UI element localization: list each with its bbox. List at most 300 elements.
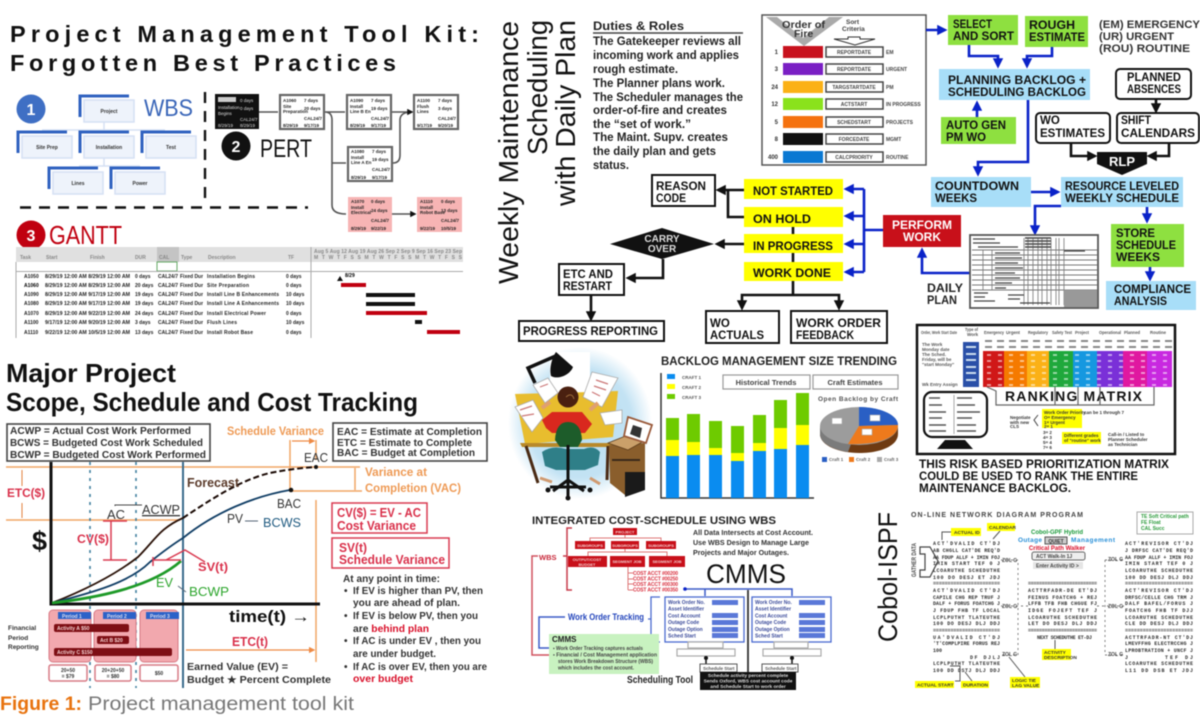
PERT nodes: 9/17/19: [417, 123, 433, 128]
chart: earned value: time(t) →: [229, 607, 310, 626]
scheduling tool: Schedule activity percent complete: [708, 673, 788, 679]
PERT nodes: 7 days: [372, 149, 387, 154]
duties and roles: the daily plan and gets: [593, 144, 716, 158]
duties and roles: The Gatekeeper reviews all: [593, 34, 741, 48]
centre code column: IDGE FOJEFT TEF J: [1028, 608, 1097, 614]
PERT nodes: Install: [350, 104, 363, 109]
legend: ACWP BCWS BCWP: ACWP = Actual Cost Work Performed: [10, 426, 191, 437]
PERT start node: Installation: [218, 105, 240, 110]
black outlined boxes: ABSENCES: [1127, 84, 1181, 96]
WBS red tree: COST ACCT #00300: [633, 582, 678, 588]
work order forms: Schedule Start: [703, 666, 735, 671]
order of fire table: URGENT: [886, 67, 907, 73]
matrix notes: Negotiate: [1010, 415, 1031, 420]
duties and roles: status.: [593, 158, 629, 172]
matrix notes: with new: [1009, 420, 1029, 425]
green legend box: CAL Succ: [1141, 526, 1165, 532]
PERT nodes: Line A En: [351, 160, 372, 165]
PERT nodes: Robot Base: [420, 210, 446, 215]
matrix header: Order, Work Start Date: [921, 330, 957, 335]
yellow annotation labels: DURATION: [963, 682, 988, 688]
yellow annotation labels: LOGIC TIE: [1012, 678, 1037, 684]
yellow annotation labels: LAG VALUE: [1012, 683, 1040, 689]
variance at completion label: Completion (VAC): [365, 481, 461, 495]
matrix notes: 5= 4: [1043, 440, 1052, 445]
GANTT heading: GANTT: [49, 220, 122, 250]
gantt table: Start: [46, 255, 58, 261]
left code column: =======================: [933, 581, 1000, 587]
perform work: PERFORM: [892, 218, 952, 232]
gantt table: A1070: [24, 311, 39, 317]
centre code column: NEXT SCHEDUTHE ET-DJ: [1037, 635, 1092, 641]
pie chart: Craft 3: [884, 457, 899, 462]
centre code column: [1028, 581, 1097, 641]
WBS red tree: SUBGROUPS: [648, 543, 674, 548]
text block: at any point in time: At any point in time:: [343, 574, 440, 585]
GUI hybrid title: QUIET: [1048, 539, 1064, 545]
right code column: ACTTRFADR-NT CT'DJ: [1125, 635, 1193, 641]
matrix colour columns: [963, 342, 1172, 387]
PERT nodes: A1080: [351, 149, 365, 154]
left code column: 100: [933, 648, 942, 654]
PERT nodes: 10/5/19: [441, 226, 457, 231]
carry over diamond: OVER: [648, 244, 677, 255]
order of fire table: [762, 15, 926, 165]
matrix notes: 2= 1: [1044, 424, 1053, 429]
order of fire table: 3: [775, 67, 779, 73]
text block: at any point in time: you are ahead of plan.: [353, 598, 460, 609]
work order tracking: Work Order Tracking: [568, 612, 644, 622]
carry over diamond: CARRY: [644, 234, 680, 245]
PERT nodes: 7 days: [438, 98, 453, 103]
PERT nodes: CAL24/7: [441, 218, 460, 223]
scheduling tool: [627, 672, 796, 690]
figure caption: Project management tool kit: [88, 694, 355, 715]
right code column: ACT'REVISOR CT'DJ: [1125, 588, 1193, 594]
green legend box: [1137, 512, 1193, 534]
gantt table: A1100: [24, 320, 39, 326]
PERT nodes: CAL24/7: [372, 167, 391, 172]
work order forms: Asset Identifier: [668, 606, 704, 612]
work order forms: Outage Code: [668, 620, 699, 626]
PERT start node: [215, 94, 259, 129]
chart: earned value: SV(t): [198, 560, 228, 574]
ranking caption: COULD BE USED TO RANK THE ENTIRE: [919, 469, 1138, 483]
black outlined boxes: CODE: [656, 193, 686, 205]
PERT nodes: A1060: [283, 98, 297, 103]
panel: WBS: [16, 94, 196, 194]
black outlined boxes: WO: [1040, 115, 1060, 127]
earned value formula: Budget ★ Percent Complete: [187, 675, 331, 686]
blue backlog boxes: COMPLIANCE: [1114, 284, 1191, 296]
gantt table: 8/29/19 12:00 AM 8/29/19 12:00 AM: [45, 274, 130, 280]
PERT start node: 8/29/19: [218, 123, 234, 128]
right code column: IMIN START TEF 0 J: [1125, 561, 1193, 567]
daily plan form: DAILY: [927, 283, 963, 295]
WBS red tree: SUBGROUPS: [577, 543, 603, 548]
blue backlog boxes: SCHEDULING BACKLOG: [948, 87, 1086, 99]
CMMS green note: ▪ Work Order Tracking captures actuals: [553, 646, 643, 652]
black outlined boxes: REASON: [656, 181, 706, 193]
daily plan form: PLAN: [927, 295, 957, 307]
blue backlog boxes: WEEKLY SCHEDULE: [1065, 193, 1179, 205]
right code column: FOATCHG FHB TF DJJ: [1125, 608, 1193, 614]
gantt table: Flush Lines: [207, 320, 237, 326]
chart: earned value: $: [32, 526, 47, 556]
illustration: planner at desk: [508, 347, 652, 500]
black outlined boxes: PLANNED: [1127, 72, 1181, 84]
CMMS green note: [549, 634, 659, 674]
gantt table: Fixed Dur: [180, 311, 203, 317]
pie chart: Craft 1: [829, 457, 844, 462]
text block: at any point in time: [343, 574, 487, 685]
status boxes yellow: [744, 179, 843, 281]
work order forms: Work Order No.: [668, 600, 705, 606]
right code column: CLE DD DESJ DLJ DDJ: [1125, 621, 1193, 627]
gantt table: 19 days: [135, 301, 154, 307]
gantt table: Fixed Dur: [180, 301, 203, 307]
text block: at any point in time: over budget: [353, 674, 414, 685]
duties and roles: The Maint. Supv. creates: [593, 130, 728, 144]
ETC(t) span: [186, 635, 314, 650]
legend: EAC ETC BAC: ETC = Estimate to Complete: [337, 438, 472, 449]
ranking caption: MAINTENANCE BACKLOG.: [919, 481, 1071, 495]
gantt table: Fixed Dur: [180, 292, 203, 298]
PERT nodes: 7 days: [371, 98, 386, 103]
centre code column: LCOARUTHE SCHEDUTHE: [1028, 615, 1097, 621]
order of fire table: MGMT: [886, 137, 901, 143]
WBS red tree: WBS: [539, 553, 556, 562]
matrix notes: can be 1 through 7: [1084, 410, 1125, 415]
panel: backlog trending: [661, 354, 899, 498]
PERT heading: PERT: [260, 135, 312, 163]
tabs: [723, 375, 898, 389]
right code column: AA FDUP ALLF + IMIN FOJ: [1125, 555, 1193, 561]
matrix header: Project: [1075, 330, 1089, 335]
text block: at any point in time: •: [344, 662, 348, 673]
order of fire table: ROUTINE: [886, 155, 909, 161]
left code column: UA'DVALID CT'DJ: [933, 635, 1000, 641]
gantt bars: [337, 273, 460, 334]
GUI hybrid title: Critical Path Walker: [1029, 546, 1086, 552]
yellow annotation labels: ACTUAL ID: [954, 530, 980, 536]
rotated heading: Cobol-ISPF: [873, 512, 903, 642]
gantt table: CAL24/7: [158, 301, 178, 307]
matrix notes: Planner Scheduler: [1108, 437, 1148, 442]
green process boxes: [941, 15, 1184, 267]
RLP shape: RLP: [1109, 154, 1135, 169]
PERT nodes: CAL24/7: [371, 116, 390, 121]
text block: at any point in time: If EV is higher than PV, then: [353, 586, 483, 597]
gantt table: Aug 5 Aug 12 Aug 19 Aug 26 Sep 2 Sep 9 Sep 16 Sep 23 Sep: [314, 249, 462, 255]
WBS tree: Power: [132, 181, 148, 187]
gantt table: A1110: [24, 330, 38, 336]
panel: PERT: [215, 94, 462, 232]
order of fire table: 24: [771, 85, 779, 91]
right code column: =======================: [1125, 628, 1193, 634]
right code column: =======================: [1125, 581, 1193, 587]
order of fire table: SCHEDSTART: [837, 120, 871, 126]
pie chart: Open Backlog by Craft: [818, 396, 899, 403]
WBS tree: Test: [166, 145, 176, 151]
PERT nodes: 9/22/19: [420, 226, 436, 231]
financial period reporting: Period: [8, 635, 28, 642]
perform work: [883, 215, 961, 247]
variance at completion label: Variance at: [365, 465, 427, 479]
matrix notes: CLS: [1010, 424, 1019, 429]
gantt table: Finish: [90, 255, 105, 261]
WBS heading: WBS: [144, 95, 193, 122]
gantt table: Install Line B Enhancements: [207, 292, 279, 298]
gantt table: A1090: [24, 292, 39, 298]
work order forms: Schedule Start: [765, 666, 797, 671]
PERT nodes: 8/29/19: [350, 123, 366, 128]
PERT start node: 0 days: [240, 106, 254, 111]
GUI hybrid title: ACT Walk-In 1J: [1036, 554, 1072, 560]
black outlined boxes: [519, 69, 1199, 343]
order of fire table: 400: [768, 155, 779, 161]
matrix header: "start Monday": [922, 362, 954, 367]
ranking caption: [919, 457, 1169, 495]
matrix notes: Different grades: [1064, 433, 1099, 438]
GUI hybrid title: [1018, 530, 1116, 570]
financial period reporting: $50: [155, 671, 163, 677]
text block: at any point in time: If EV is below PV, then you: [353, 611, 478, 622]
panel: weekly maintenance scheduling: [493, 15, 1200, 343]
order of fire table: CALCPRIORITY: [835, 155, 873, 161]
financial period reporting: Act B $20: [100, 638, 123, 644]
financial period reporting: Period 2: [107, 614, 127, 620]
right code column: LCOARUTHE SCHEDUTHE: [1125, 661, 1193, 667]
matrix header: The Work: [922, 342, 943, 347]
PERT nodes: A1100: [417, 98, 431, 103]
legend: EAC ETC BAC: EAC = Estimate at Completion: [337, 427, 482, 438]
right code column: [1125, 541, 1193, 674]
gantt table: 0 days: [286, 311, 302, 317]
rotated heading: Weekly Maintenance: [493, 21, 524, 284]
right code column: J: [1125, 655, 1128, 661]
pie chart: Craft 2: [856, 457, 871, 462]
order of fire table: PM: [886, 85, 894, 91]
work order forms: [648, 587, 831, 672]
callout: schedule variance: SV(t): [339, 541, 367, 555]
black outlined boxes: FEEDBACK: [796, 330, 855, 342]
PERT nodes: 8/29/19: [351, 175, 367, 180]
panel: Cobol-ISPF: ZOL G: [1002, 604, 1017, 610]
PERT start node: CAL24/7: [240, 117, 258, 122]
gantt table: Install Electrical Power: [207, 311, 266, 317]
matrix notes: 7= 6: [1043, 445, 1052, 450]
work order tracking: [539, 612, 644, 648]
perform work: WORK: [903, 230, 941, 244]
PERT nodes: 24 days: [371, 208, 388, 213]
right code column: LCOARUTHE SCHEDUTHE: [1125, 568, 1193, 574]
gantt table: A1050: [24, 274, 39, 280]
figure caption: Figure 1:: [0, 694, 82, 715]
work order forms: Cost Account: [668, 614, 701, 620]
centre code column: ACTTRFADR-DE ET'DJ: [1028, 588, 1097, 594]
variance at completion label: [365, 465, 461, 495]
legend: ACWP BCWS BCWP: BCWP = Budgeted Cost Work Performed: [10, 450, 206, 461]
PERT nodes: Preparation: [283, 109, 308, 114]
green process boxes: SELECT: [953, 19, 992, 31]
legend: ACWP BCWS BCWP: [7, 424, 210, 461]
blue backlog boxes: RESOURCE LEVELED: [1065, 181, 1179, 193]
gantt table: Site Preparation: [207, 283, 249, 289]
PERT nodes: Install: [351, 205, 364, 210]
PERT nodes: 20 days: [304, 106, 321, 111]
priority key: (EM) EMERGENCY: [1099, 19, 1200, 31]
priority key: (ROU) ROUTINE: [1099, 43, 1190, 55]
earned value formula: [187, 662, 331, 686]
arrows: flow black: [591, 99, 1169, 319]
matrix header: Friday, will be: [922, 357, 952, 362]
WBS red tree: SEGMENT JOB: [652, 559, 682, 564]
rotated heading: Scheduling: [522, 20, 553, 155]
text block: at any point in time: are under budget.: [353, 649, 436, 660]
icon: number 1: [16, 94, 46, 124]
carry over diamond: [610, 228, 714, 259]
matrix header: Planned: [1124, 330, 1140, 335]
order of fire table: REPORTDATE: [837, 50, 872, 56]
black outlined boxes: CALENDARS: [1121, 128, 1195, 140]
chart: earned value: ACWP: [142, 502, 180, 517]
left code column: ACT'DVALID CT'DJ: [933, 541, 1000, 547]
gantt table: 10 days: [286, 301, 305, 307]
financial period reporting: Activity C $150: [57, 650, 93, 656]
gantt table: 8/29/19 12:00 AM 9/17/19 12:00 AM: [45, 292, 130, 298]
RLP shape: [1097, 152, 1147, 175]
gantt table: 8/29/19 12:00 AM 9/17/19 12:00 AM: [45, 301, 130, 307]
right code column: LCOARUTHE SCHEDUTHE: [1125, 615, 1193, 621]
left code column: J FDUP FHB TF LOCAL: [933, 608, 1000, 614]
WBS tree: Site Prep: [36, 145, 58, 151]
right code column: LMEVFFHG ELECTRCCHG J: [1125, 641, 1193, 647]
gantt table: 10 days: [286, 292, 305, 298]
WBS tree: Lines: [71, 181, 85, 187]
matrix notes: Call-in / Listed to: [1108, 432, 1145, 437]
gantt table: 9/17/19 12:00 AM 9/20/19 12:00 AM: [45, 320, 130, 326]
gantt table: Fixed Dur: [180, 330, 203, 336]
panel: ranking matrix: [917, 325, 1175, 454]
program title: ON-LINE NETWORK DIAGRAM PROGRAM: [911, 512, 1083, 519]
PERT start node: 8/29/19: [240, 123, 256, 128]
callout: schedule variance: [332, 538, 449, 568]
matrix header: Type of: [965, 327, 978, 332]
chart: earned value: EV: [156, 575, 173, 590]
work order forms: Asset Identifier: [755, 606, 791, 612]
status boxes yellow: ON HOLD: [753, 214, 811, 226]
black outlined boxes: SHIFT: [1121, 115, 1151, 127]
status boxes yellow: WORK DONE: [753, 268, 831, 280]
left code column: DF DJLJ: [970, 655, 1000, 661]
matrix header: The Sched.: [922, 352, 946, 357]
WBS tree: Installation: [96, 145, 122, 151]
icon: number 3: 3: [27, 228, 36, 245]
blue backlog boxes: PLANNING BACKLOG +: [948, 75, 1086, 87]
PERT nodes: A1070: [351, 199, 365, 204]
financial period reporting: Activity A $50: [57, 626, 90, 632]
centre code column: FEINUS FOATCHG + REJ: [1028, 595, 1097, 601]
order of fire table: Fire: [794, 28, 813, 40]
left code column: DALF + FORUS FOATCHG J: [933, 601, 1000, 607]
WBS tree: [18, 96, 196, 194]
blue backlog boxes: ANALYSIS: [1114, 296, 1167, 308]
matrix header: Routine: [1150, 330, 1166, 335]
monitor: [924, 392, 987, 449]
PERT nodes: Line B En: [350, 109, 371, 114]
intersect note: [693, 528, 813, 557]
panel: Cobol-ISPF: ZOL G: [1108, 557, 1123, 563]
blue backlog boxes: [931, 69, 1196, 310]
matrix header: Urgent: [1006, 330, 1020, 335]
callout: cost variance: CV($) = EV - AC: [337, 506, 421, 520]
chart: earned value: EAC: [304, 450, 328, 465]
PERT nodes: 8/29/19: [283, 123, 299, 128]
gantt table: CAL24/7: [158, 320, 178, 326]
duties and roles: The Scheduler manages the: [593, 90, 743, 104]
gantt table: 3 days: [135, 320, 151, 326]
left code column: AA FDUP ALLF + IMIN FOJ: [933, 555, 1000, 561]
chart: earned value: [6, 440, 362, 688]
text block: at any point in time: •: [344, 611, 348, 622]
right code column: DALF BAFEL/FORUS J: [1125, 601, 1193, 607]
black outlined boxes: WO: [710, 318, 730, 330]
stacked bar chart: CRAFT 3: [682, 395, 701, 400]
duties and roles: Duties & Roles: [593, 19, 684, 33]
callout: cost variance: Cost Variance: [337, 519, 416, 533]
gather data arrow: GATHER DATA: [912, 542, 918, 577]
panel: integrated cost schedule: [532, 515, 831, 690]
green legend box: FE Float: [1141, 520, 1161, 526]
gantt table: Type: [181, 255, 193, 261]
yellow annotation labels: DESCRIPTION: [1044, 655, 1077, 661]
heading: major project: Scope, Schedule and Cost Tracking: [6, 387, 418, 417]
title: Project Management Tool Kit:: [10, 21, 479, 47]
chart: earned value: Forecast: [187, 475, 240, 490]
duties and roles: the “set of work.”: [593, 117, 691, 131]
right code column: DRFSC/CELLE CHG TRM J: [1125, 595, 1193, 601]
matrix notes: [1009, 409, 1148, 450]
PERT nodes: Electrical: [351, 210, 371, 215]
black outlined boxes: ACTUALS: [710, 330, 764, 342]
gantt table: Description: [208, 255, 236, 261]
status boxes yellow: IN PROGRESS: [753, 241, 833, 253]
PERT nodes: 9/20/19: [438, 123, 454, 128]
matrix header: Wk Entry Assign: [922, 382, 958, 387]
PERT nodes: A1090: [350, 98, 364, 103]
arrows: flow blue: [846, 30, 1150, 279]
financial period reporting: Period 1: [62, 614, 82, 620]
gantt table: TF: [288, 255, 294, 261]
PERT nodes: 0 days: [371, 199, 386, 204]
WBS red tree: COST ACCT #00350: [633, 588, 678, 594]
WBS red tree: BUDGET: [579, 562, 596, 567]
order of fire table: REPORTDATE: [837, 67, 872, 73]
gantt table: 0 days: [286, 330, 302, 336]
chart: earned value: CV($): [77, 532, 109, 546]
gantt table: A1060: [24, 283, 39, 289]
panel: Cobol-ISPF: ZOL G: [1108, 652, 1123, 658]
gantt table: CAL24/7: [158, 283, 178, 289]
matrix header: Emergency: [984, 330, 1004, 335]
gantt table: 9/22/19 12:00 AM 10/5/19 12:00 AM: [45, 330, 130, 336]
gantt table: [16, 247, 463, 338]
left code column: CAPILE CHG REP TRUF J: [933, 595, 1000, 601]
left code column: ACT'DVALID CT'DJ: [933, 588, 1000, 594]
CMMS green note: which includes the cost account.: [557, 666, 635, 672]
stacked bar chart: [661, 373, 814, 498]
